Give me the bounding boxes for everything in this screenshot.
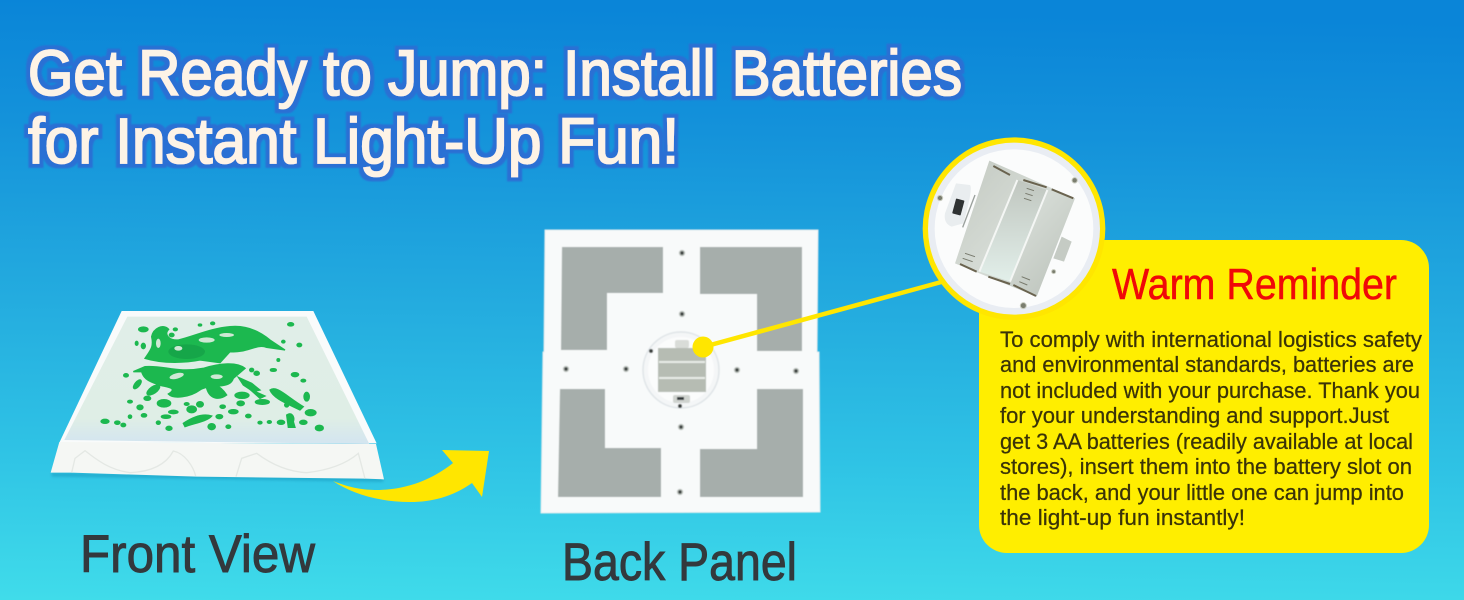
reminder body text: the back, and your little one can jump into [1000, 480, 1404, 505]
front view product: light-up tile [51, 311, 384, 482]
reminder body text: and environmental standards, batteries are [1000, 352, 1414, 377]
liquid surface [64, 317, 369, 444]
reminder body text [1000, 327, 1423, 530]
reminder body text: stores), insert them into the battery slot on [1000, 454, 1412, 479]
compartment screws [937, 178, 1077, 309]
reminder body text: not included with your purchase. Thank you [1000, 378, 1420, 403]
title: Get Ready to Jump: Install Batteries [28, 37, 962, 109]
liquid gaps [156, 333, 234, 380]
reminder heading: Warm Reminder [1112, 260, 1397, 309]
speaker grille top right [700, 247, 802, 351]
magnified battery compartment [923, 137, 1105, 320]
front view label: Front View [80, 525, 316, 584]
back panel [541, 230, 820, 513]
power switch [945, 183, 975, 227]
speaker grille bottom left [558, 389, 661, 497]
front edge scallops [72, 451, 365, 479]
reminder body text: To comply with international logistics safety [1000, 327, 1423, 352]
battery compartment [643, 332, 719, 408]
tile shadow [52, 473, 383, 482]
title: for Instant Light-Up Fun! [28, 105, 679, 177]
back panel label: Back Panel [562, 533, 797, 592]
panel body [541, 230, 820, 513]
panel background [979, 240, 1429, 553]
battery tray [955, 161, 1075, 297]
warm reminder panel [979, 240, 1429, 553]
magnifier ring [923, 137, 1105, 320]
tray dividers [979, 180, 1047, 282]
yellow callout line and dot [692, 281, 945, 358]
speaker grille top left [561, 247, 663, 350]
reminder body text: for your understanding and support.Just [1000, 403, 1390, 428]
reminder body text: the light-up fun instantly! [1000, 505, 1245, 530]
compartment housing [928, 143, 1100, 315]
curved yellow arrow [333, 450, 489, 502]
tile front edge [51, 442, 384, 479]
darker green core [168, 344, 205, 359]
side latch [1053, 237, 1072, 262]
tile frame top [59, 311, 377, 443]
tray contacts [960, 166, 1073, 296]
screw holes [564, 251, 798, 494]
reminder body text: get 3 AA batteries (readily available at local [1000, 429, 1413, 454]
speaker grille bottom right [700, 389, 803, 497]
title [28, 37, 962, 177]
green liquid pattern [101, 322, 323, 431]
middle battery bay [979, 180, 1047, 282]
